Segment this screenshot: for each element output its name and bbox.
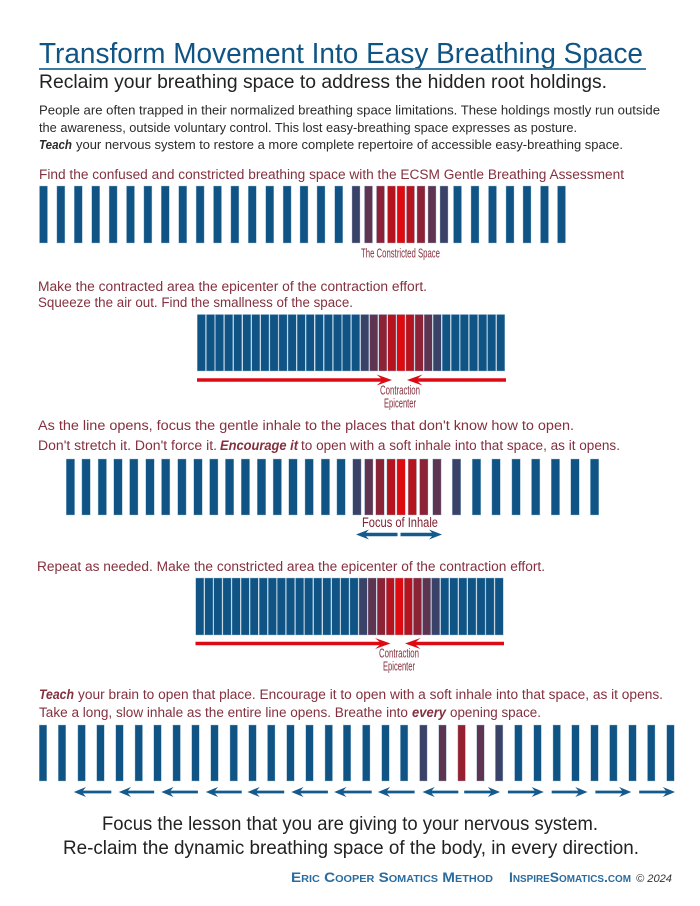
closing statement: Re-claim the dynamic breathing space of the body, in every direction. — [63, 838, 639, 859]
step 2 instruction: Squeeze the air out. Find the smallness of the space. — [38, 295, 353, 310]
label: contraction epicenter: Epicenter — [383, 658, 415, 674]
red contraction arrows — [196, 638, 504, 649]
step 3 instruction: Encourage it — [220, 438, 298, 453]
title: Transform Movement Into Easy Breathing Space — [39, 38, 643, 70]
label: focus of inhale: Focus of Inhale — [362, 515, 438, 530]
subtitle: Reclaim your breathing space to address the hidden root holdings. — [39, 71, 607, 93]
intro text block: People are often trapped in their normalized breathing space limitations. These holdings mostly run outside — [39, 102, 660, 118]
label: contraction epicenter: Contraction — [380, 382, 420, 398]
step 3 instruction: Don't stretch it. Don't force it. — [38, 438, 217, 453]
step 2 compressed bar line — [197, 314, 505, 371]
label: contraction epicenter: Contraction — [379, 646, 419, 660]
footer credits: © 2024 — [636, 873, 672, 885]
step 5 instruction: your brain to open that place. Encourage it to open with a soft inhale into that space, as it opens. — [78, 687, 663, 702]
step 5 instruction: Take a long, slow inhale as the entire line opens. Breathe into — [39, 705, 408, 720]
intro text block: your nervous system to restore a more complete repertoire of accessible easy-breathing space. — [76, 137, 623, 152]
step 5 instruction: every — [412, 705, 447, 720]
step 4 compressed bar line — [196, 578, 503, 635]
step 1 bar line — [40, 186, 566, 243]
step 1 instruction: Find the confused and constricted breathing space with the ECSM Gentle Breathing Assessment — [39, 167, 624, 182]
label: contraction epicenter: Epicenter — [384, 396, 416, 410]
footer credits — [291, 869, 672, 885]
red contraction arrows — [197, 374, 506, 386]
footer credits: InspireSomatics.com — [509, 869, 631, 885]
label: the constricted space: The Constricted Space — [361, 246, 440, 260]
intro text block — [39, 102, 660, 152]
intro text block: Teach — [39, 137, 72, 152]
step 5 instruction: Teach — [39, 687, 74, 702]
step 2 instruction — [38, 279, 427, 310]
step 3 instruction: As the line opens, focus the gentle inhale to the places that don't know how to open. — [38, 418, 574, 433]
blue inhale arrows — [356, 530, 442, 540]
closing statement — [63, 814, 639, 859]
row of outward blue arrows — [74, 787, 675, 797]
intro text block: the awareness, outside voluntary control. This lost easy-breathing space expresses as posture. — [39, 120, 577, 135]
step 3 instruction — [38, 418, 620, 453]
closing statement: Focus the lesson that you are giving to your nervous system. — [102, 814, 598, 835]
step 4 instruction: Repeat as needed. Make the constricted area the epicenter of the contraction effort. — [37, 559, 545, 574]
step 3 opening bar line — [66, 459, 599, 515]
step 2 instruction: Make the contracted area the epicenter of the contraction effort. — [38, 279, 427, 294]
step 5 fully open bar line — [39, 725, 674, 781]
step 5 instruction: opening space. — [450, 705, 541, 720]
label: contraction epicenter — [380, 382, 420, 410]
step 5 instruction — [39, 687, 663, 720]
step 3 instruction: to open with a soft inhale into that space, as it opens. — [301, 438, 620, 453]
label: contraction epicenter — [379, 646, 419, 674]
footer credits: Eric Cooper Somatics Method — [291, 869, 493, 885]
